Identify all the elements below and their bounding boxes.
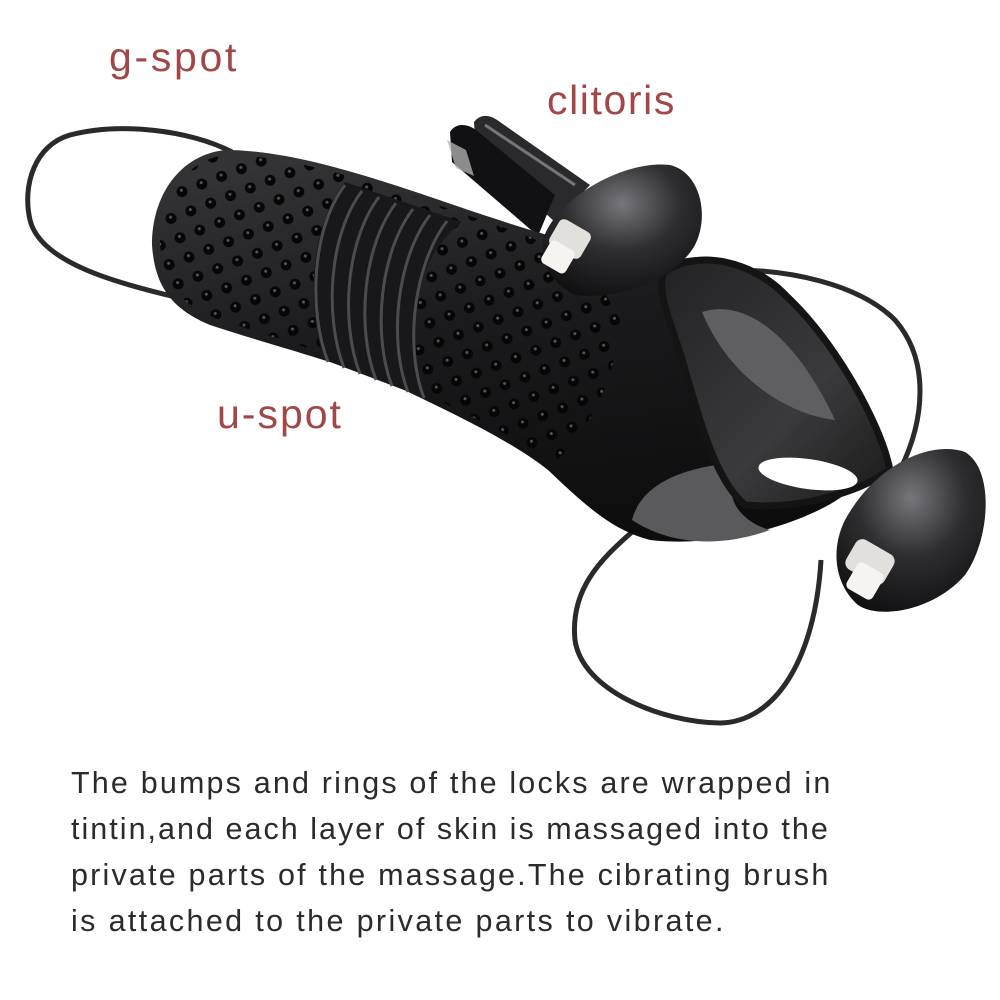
description text	[71, 766, 832, 938]
label: clitoris: clitoris	[547, 77, 676, 123]
ribbed rings	[313, 182, 462, 398]
base cutaway	[632, 462, 770, 541]
vibrating bullet: bottom	[836, 449, 986, 612]
description text: The bumps and rings of the locks are wrapped in	[71, 766, 832, 800]
vibrating bullet: top	[539, 164, 702, 296]
label: g-spot: g-spot	[109, 34, 239, 80]
label: u-spot: u-spot	[217, 391, 343, 437]
description text: private parts of the massage.The cibrating brush	[71, 858, 831, 892]
wire: bottom loop	[574, 532, 821, 723]
bump texture	[160, 155, 620, 462]
clitoral brush tips	[447, 116, 590, 236]
wire: right loop	[720, 270, 920, 470]
sleeve body	[152, 150, 890, 542]
description text: tintin,and each layer of skin is massaged into the	[71, 812, 830, 846]
wire: left loop	[28, 129, 232, 298]
description text: is attached to the private parts to vibrate.	[71, 904, 726, 938]
translucent ring	[662, 260, 890, 506]
ring opening	[756, 452, 860, 496]
